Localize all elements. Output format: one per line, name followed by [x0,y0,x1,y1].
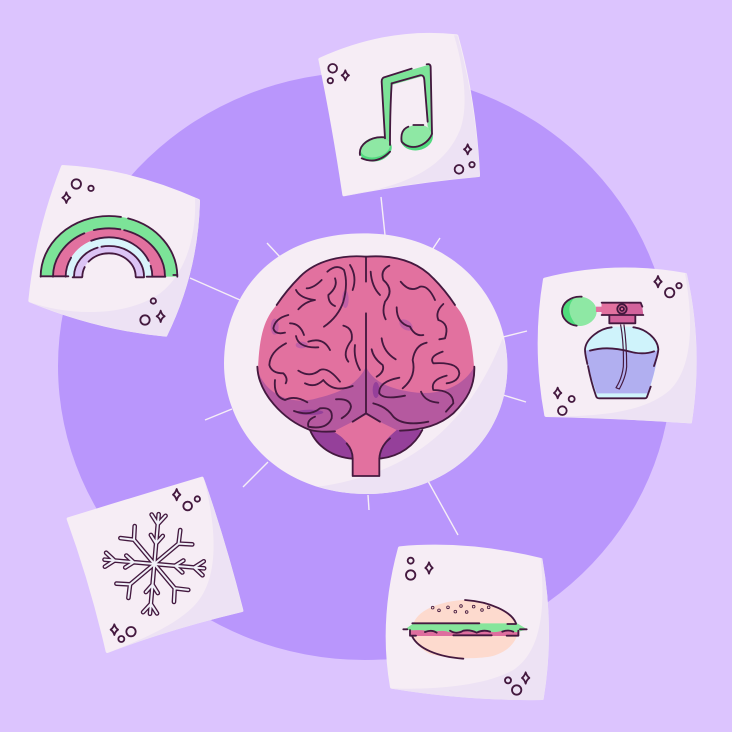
brain illustration [257,256,474,476]
icon: perfume bottle [562,297,658,398]
panel: sight card [28,167,200,337]
panel: central brain disc [224,233,507,494]
large purple circle [58,72,672,660]
burger sesame seeds [431,605,490,613]
icon: sparkles and bubbles [62,179,165,325]
icon: sparkles and bubbles [111,489,200,642]
icon: rainbow [41,216,177,277]
panel: hearing card [320,34,480,196]
icon: sparkles and bubbles [554,276,682,415]
icon: sparkles and bubbles [328,64,475,174]
icon: music notes [357,64,435,165]
icon: burger [403,600,527,659]
icon: snowflake [104,514,205,614]
connector rays [190,197,527,535]
panel: smell card [539,269,696,423]
icon: sparkles and bubbles [406,558,529,695]
panel: taste card [387,546,549,700]
panel: touch card [68,477,243,653]
